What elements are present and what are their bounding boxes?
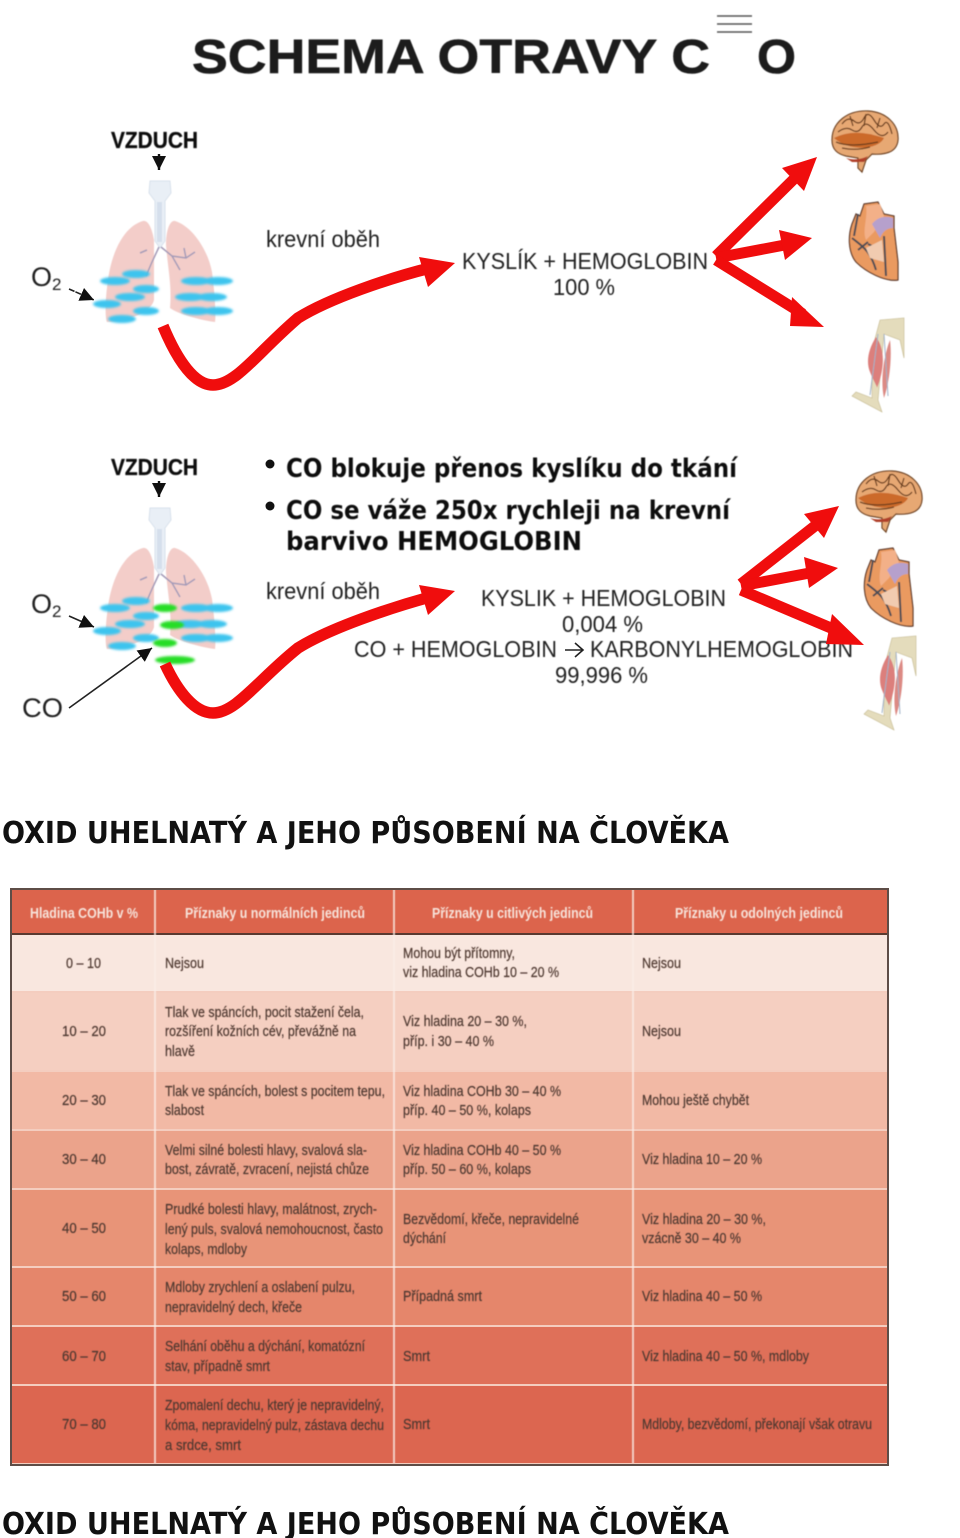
icon: heart <box>864 548 913 626</box>
row: 40-50: lený puls, svalová nemohoucnost, často <box>165 1222 383 1238</box>
row: 40-50: kolaps, mdloby <box>165 1242 248 1258</box>
oxygen molecules <box>93 597 233 650</box>
bullet text: barvivo HEMOGLOBIN <box>286 527 582 557</box>
row: 40-50: 40 – 50 <box>62 1221 106 1237</box>
arrow: circulation curve <box>165 585 455 713</box>
title <box>192 16 796 84</box>
label: CO: CO <box>22 693 63 723</box>
text: hemoglobin reactions: 99,996 % <box>555 662 648 688</box>
row: 20-30: Viz hladina COHb 30 – 40 % <box>403 1084 561 1100</box>
row: 30-40 <box>62 1143 762 1178</box>
row: 60-70 <box>62 1339 810 1375</box>
arrow: circulation curve <box>163 257 455 385</box>
bullet text: CO blokuje přenos kyslíku do tkání <box>286 454 739 484</box>
icon: arm muscle <box>852 318 904 412</box>
arrow: air into lungs <box>158 154 160 170</box>
row: 0-10: Nejsou <box>642 956 681 972</box>
row: 70-80: a srdce, smrt <box>165 1438 241 1454</box>
row: 60-70: Selhání oběhu a dýchání, komatózní <box>165 1339 365 1355</box>
label: O2: 2 <box>52 275 61 294</box>
icon: heart <box>849 202 898 280</box>
CO molecules <box>153 604 195 664</box>
row: 20-30: slabost <box>165 1103 204 1119</box>
table header: Hladina COHb v % <box>30 906 138 922</box>
arrows: to organs <box>741 522 845 634</box>
row: 20-30: příp. 40 – 50 %, kolaps <box>403 1103 531 1119</box>
row: 50-60: Mdloby zrychlení a oslabení pulzu, <box>165 1280 355 1296</box>
icon: lungs <box>106 508 215 649</box>
title: O <box>757 31 796 84</box>
arrows: to organs <box>716 176 803 314</box>
row: 10-20: Tlak ve spáncích, pocit stažení čela, <box>165 1005 364 1021</box>
text: oxygen + hemoglobin <box>462 248 708 300</box>
row: 40-50: Prudké bolesti hlavy, malátnost, zrych- <box>165 1202 377 1218</box>
label: O2: O <box>31 262 52 292</box>
table header: Příznaky u normálních jedinců <box>185 906 365 922</box>
row: 60-70: Smrt <box>403 1349 430 1365</box>
row: 10-20: hlavě <box>165 1044 195 1060</box>
arrow: CO into lungs <box>69 648 152 708</box>
row: 70-80: 70 – 80 <box>62 1417 106 1433</box>
row: 50-60: Případná smrt <box>403 1289 482 1305</box>
row: 10-20: rozšíření kožních cév, převážně na <box>165 1024 357 1040</box>
arrow: O2 into lungs <box>69 616 94 627</box>
heading: OXID UHELNATÝ A JEHO PŮSOBENÍ NA ČLOVĚKA <box>2 814 730 851</box>
row: 0-10: Mohou být přítomny, <box>403 946 515 962</box>
row: 60-70: Viz hladina 40 – 50 %, mdloby <box>642 1349 810 1365</box>
row: 50-60: 50 – 60 <box>62 1289 106 1305</box>
label: O2: O <box>31 589 52 619</box>
row: 70-80: kóma, nepravidelný pulz, zástava dechu <box>165 1418 384 1434</box>
row: 10-20: 10 – 20 <box>62 1024 106 1040</box>
text: hemoglobin reactions: KARBONYLHEMOGLOBIN <box>590 636 853 662</box>
row: 50-60: nepravidelný dech, křeče <box>165 1300 302 1316</box>
label: circulation: krevní oběh <box>266 578 380 604</box>
row: 10-20: Viz hladina 20 – 30 %, <box>403 1014 527 1030</box>
arrow: air into lungs <box>158 481 160 497</box>
row: 30-40: bost, závratě, zvracení, nejistá chůze <box>165 1162 369 1178</box>
row: 10-20: Nejsou <box>642 1024 681 1040</box>
row: 50-60: Viz hladina 40 – 50 % <box>642 1289 762 1305</box>
text: hemoglobin reactions: CO + HEMOGLOBIN <box>354 636 557 662</box>
row: 20-30 <box>62 1084 749 1119</box>
row: 50-60 <box>62 1280 762 1316</box>
row: 10-20: příp. i 30 – 40 % <box>403 1034 494 1050</box>
icon: lungs <box>106 181 215 322</box>
table header: Příznaky u citlivých jedinců <box>432 906 593 922</box>
row: 30-40: příp. 50 – 60 %, kolaps <box>403 1162 531 1178</box>
oxygen molecules <box>93 270 233 323</box>
panel: normal oxygen transport <box>31 111 904 412</box>
arrow: O2 into lungs <box>69 289 94 300</box>
row: 70-80: Mdloby, bezvědomí, překonají však otravu <box>642 1417 872 1433</box>
row: 60-70: 60 – 70 <box>62 1349 106 1365</box>
row: 40-50: Bezvědomí, křeče, nepravidelné <box>403 1212 579 1228</box>
bullet text: CO se váže 250x rychleji na krevní <box>286 496 732 526</box>
icon: arm muscle <box>864 636 916 730</box>
text: hemoglobin reactions: KYSLIK + HEMOGLOBIN <box>481 585 726 611</box>
row: 0-10 <box>66 946 681 981</box>
label: O2: 2 <box>52 602 61 621</box>
text: oxygen + hemoglobin: 100 % <box>553 274 615 300</box>
row: 40-50 <box>62 1202 766 1258</box>
title: SCHEMA OTRAVY C <box>192 31 710 84</box>
icon: brain <box>832 111 898 172</box>
row: 40-50: dýchání <box>403 1231 446 1247</box>
text: oxygen + hemoglobin: KYSLÍK + HEMOGLOBIN <box>462 248 708 274</box>
row: 70-80: Smrt <box>403 1417 430 1433</box>
row: 30-40: Viz hladina COHb 40 – 50 % <box>403 1143 561 1159</box>
icon: brain <box>856 471 922 532</box>
text: hemoglobin reactions: 0,004 % <box>562 611 643 637</box>
row: 30-40: Velmi silné bolesti hlavy, svalová sla- <box>165 1143 367 1159</box>
row: 30-40: Viz hladina 10 – 20 % <box>642 1152 762 1168</box>
label: circulation: krevní oběh <box>266 226 380 252</box>
row: 0-10: Nejsou <box>165 956 204 972</box>
row: 20-30: Tlak ve spáncích, bolest s pocitem tepu, <box>165 1084 385 1100</box>
row: 40-50: Viz hladina 20 – 30 %, <box>642 1212 766 1228</box>
text: hemoglobin reactions <box>354 585 853 688</box>
row: 0-10: viz hladina COHb 10 – 20 % <box>403 965 559 981</box>
row: 10-20 <box>62 1005 681 1060</box>
label: vzduch: VZDUCH <box>111 454 198 480</box>
row: 0-10: 0 – 10 <box>66 956 101 972</box>
row: 30-40: 30 – 40 <box>62 1152 106 1168</box>
row: 70-80 <box>62 1398 872 1454</box>
row: 70-80: Zpomalení dechu, který je nepravidelný, <box>165 1398 384 1414</box>
table header: Příznaky u odolných jedinců <box>675 906 843 922</box>
label: vzduch: VZDUCH <box>111 127 198 153</box>
panel: CO poisoning <box>22 454 922 730</box>
bullet text <box>266 454 739 557</box>
row: 20-30: Mohou ještě chybět <box>642 1093 749 1109</box>
table: COHb levels and symptoms <box>11 889 888 1465</box>
row: 40-50: vzácně 30 – 40 % <box>642 1231 741 1247</box>
row: 20-30: 20 – 30 <box>62 1093 106 1109</box>
table header <box>30 906 843 922</box>
row: 60-70: stav, případně smrt <box>165 1359 270 1375</box>
